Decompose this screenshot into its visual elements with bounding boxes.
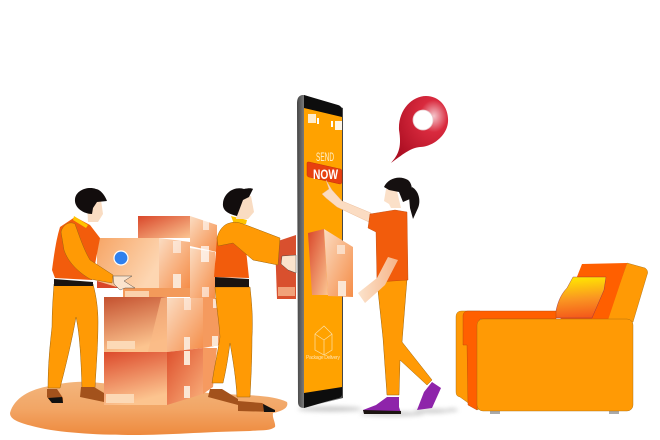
feet — [490, 411, 619, 414]
hand — [113, 276, 135, 290]
blue dot — [114, 251, 128, 265]
shoes — [47, 387, 104, 403]
cushion — [555, 277, 606, 318]
vest — [214, 223, 249, 278]
stacked boxes — [97, 216, 220, 405]
front panel — [477, 319, 633, 411]
legs — [48, 284, 98, 388]
collar — [231, 216, 247, 224]
worker right — [208, 188, 296, 412]
now button: NOW — [313, 166, 339, 182]
shoes — [363, 382, 441, 414]
send label: SEND — [316, 150, 334, 164]
hair — [384, 178, 412, 202]
floor shadows — [298, 406, 458, 416]
held box — [97, 238, 190, 288]
shirt — [368, 210, 408, 282]
arm — [61, 223, 113, 283]
worker left — [47, 188, 135, 403]
armchair — [456, 263, 648, 414]
top back box — [138, 216, 217, 252]
screen — [304, 108, 342, 393]
backrest inner — [560, 263, 627, 320]
status icons — [308, 114, 342, 130]
package icon — [315, 326, 332, 355]
location pin — [391, 96, 448, 163]
screen bezel — [304, 95, 342, 408]
hair — [75, 188, 107, 214]
legs — [212, 287, 252, 397]
lower arm — [358, 257, 398, 303]
hair — [223, 188, 253, 216]
pants — [377, 279, 432, 395]
box behind phone — [275, 235, 296, 299]
backrest — [606, 263, 648, 322]
collar — [73, 216, 88, 228]
seat band — [463, 311, 556, 410]
face — [87, 200, 103, 222]
vest — [52, 217, 100, 280]
arm — [217, 222, 280, 265]
left arm — [456, 311, 480, 410]
belt — [54, 279, 93, 286]
thin box — [123, 288, 190, 298]
face — [384, 189, 401, 208]
raised arm — [322, 180, 371, 223]
phone body — [297, 95, 343, 408]
bottom box — [104, 348, 217, 405]
now button — [307, 162, 342, 184]
package delivery label: Package Delivery — [306, 355, 340, 361]
woman — [322, 178, 441, 414]
third box — [104, 297, 220, 352]
box on phone — [308, 229, 353, 297]
phone — [297, 95, 343, 408]
face — [236, 196, 254, 219]
hand — [281, 255, 296, 273]
ground blob — [10, 382, 287, 435]
belt — [215, 277, 249, 287]
shoes — [208, 389, 275, 412]
ponytail — [409, 187, 419, 219]
right stack side — [190, 246, 215, 298]
